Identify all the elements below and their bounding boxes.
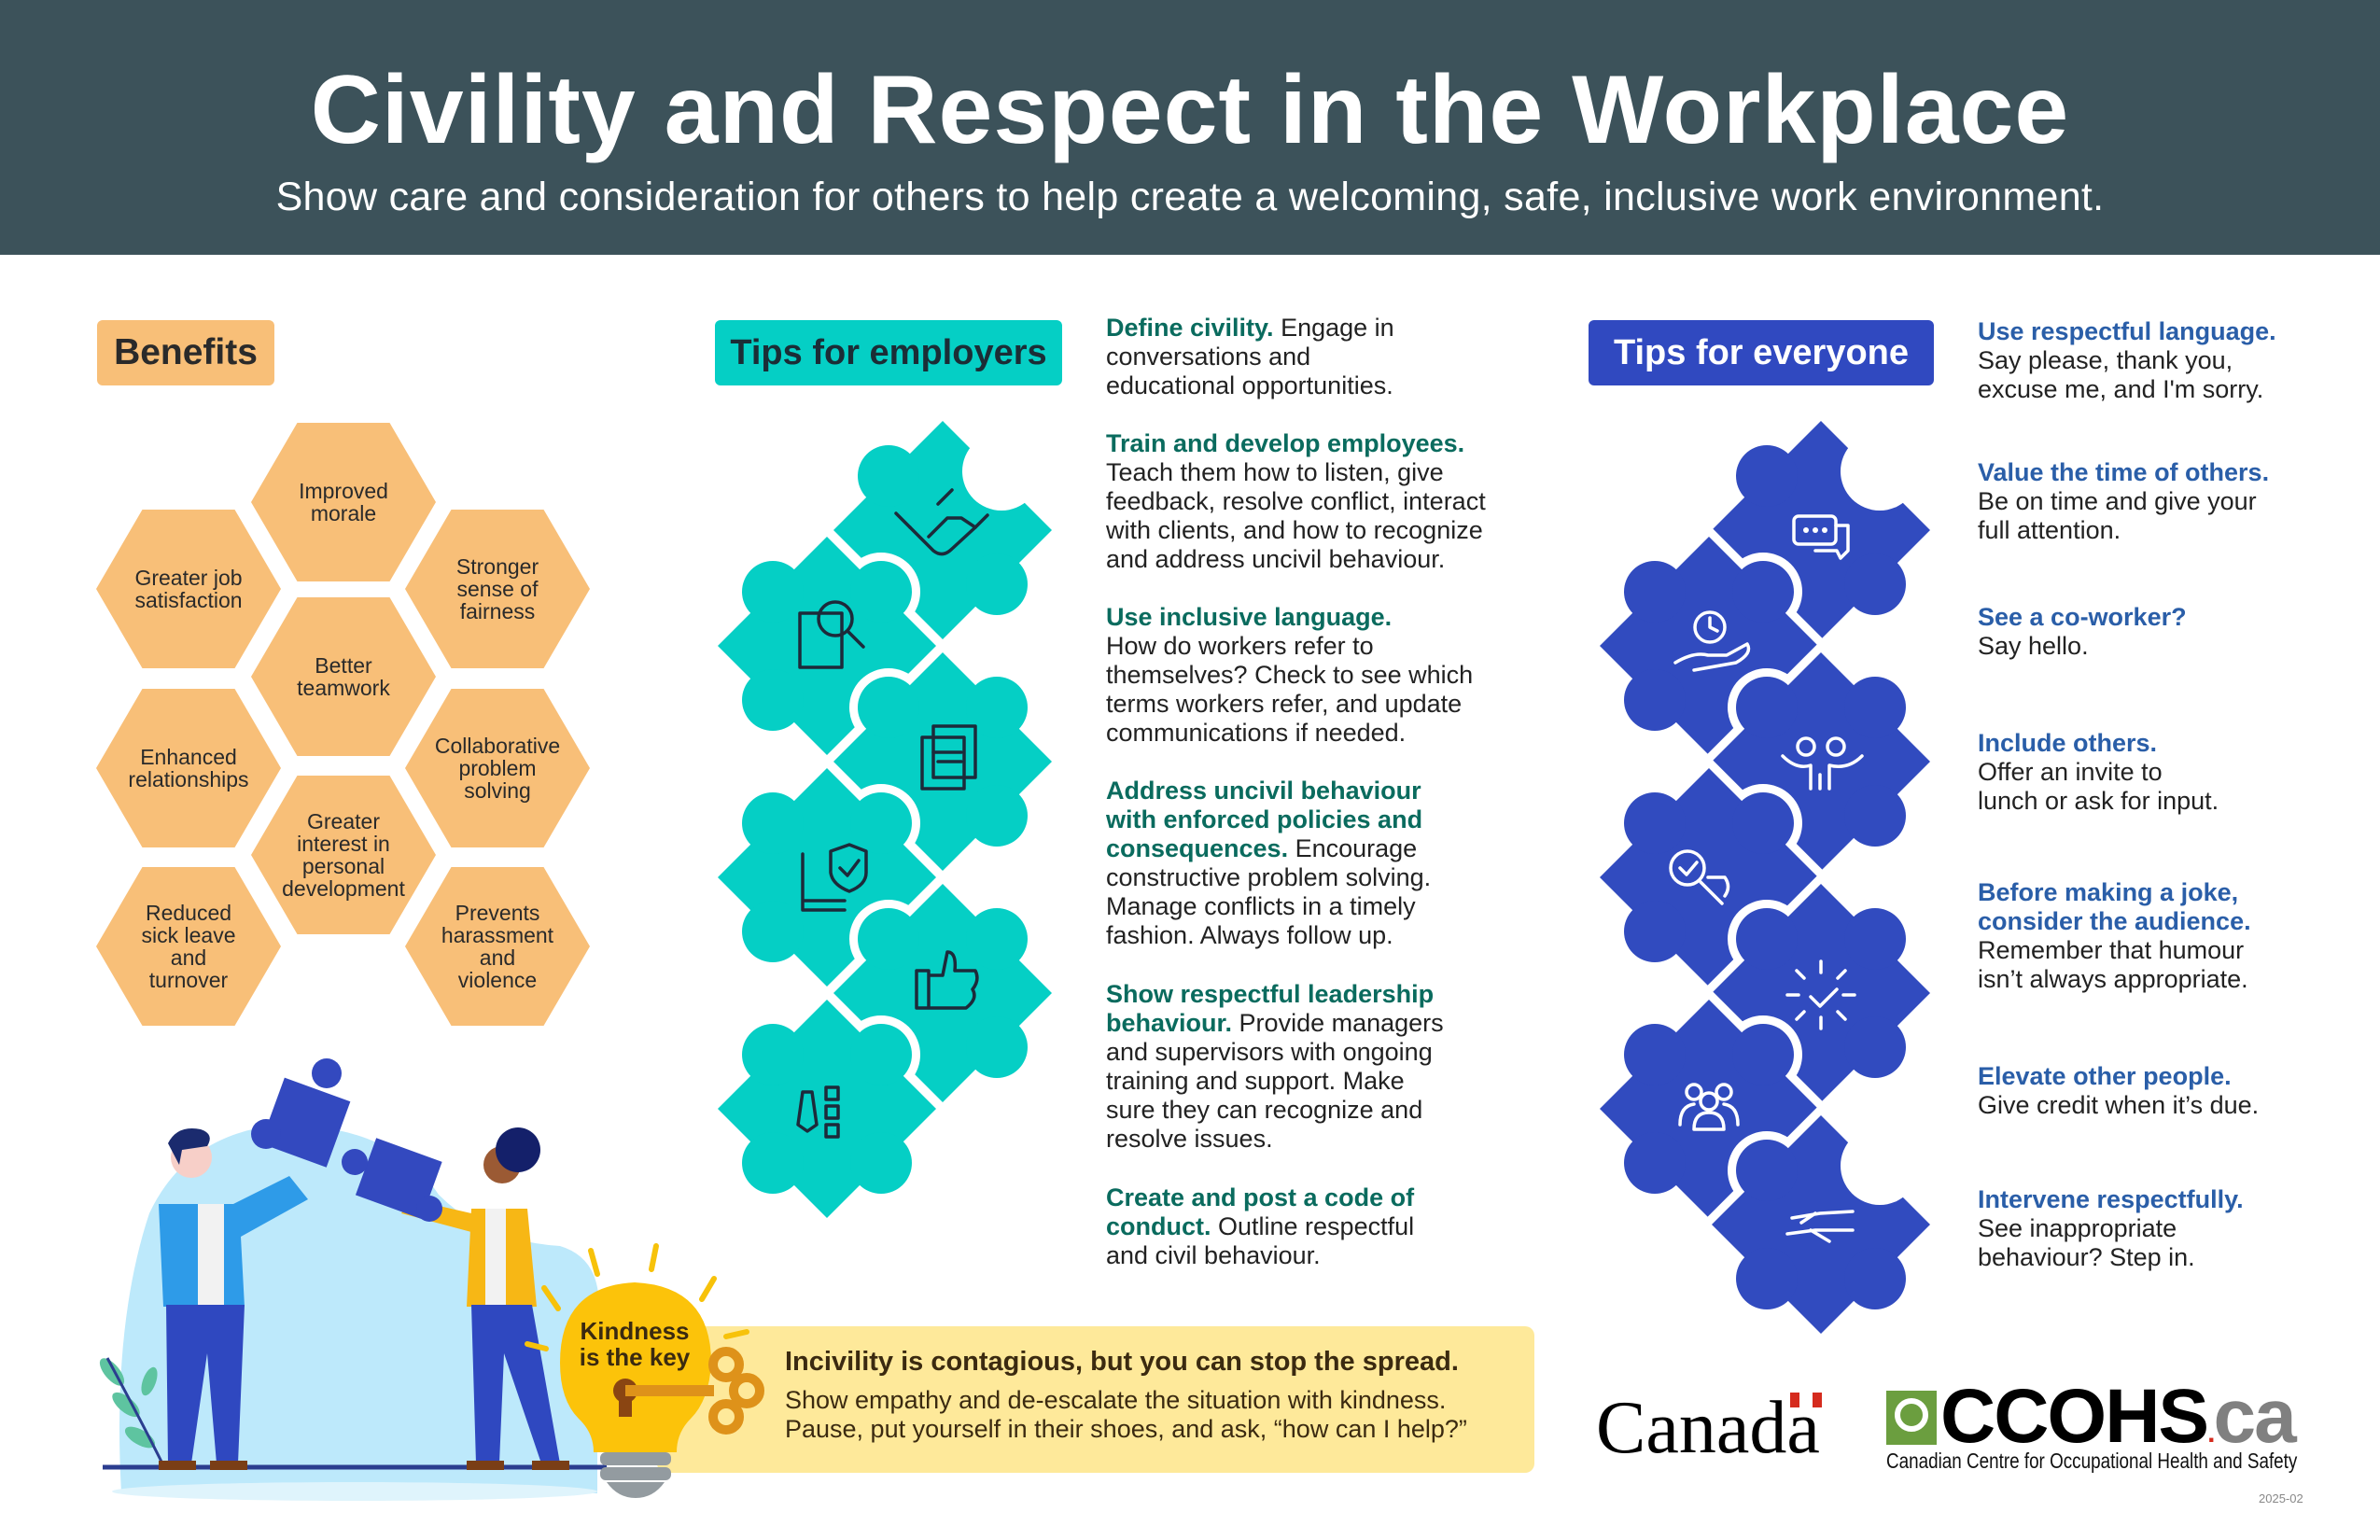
hex: prevents harassment: Prevents	[455, 901, 539, 925]
hex: stronger sense of fairness: Stronger	[456, 554, 539, 579]
text: employer tips	[1105, 314, 1486, 1269]
tip: include others: Include others.	[1978, 729, 2157, 757]
woman	[483, 1146, 521, 1183]
tip: joke: Before making a joke,	[1978, 878, 2238, 906]
tip: define civility: educational opportunities.	[1106, 371, 1393, 399]
tip: train and develop: feedback, resolve conflict, interact	[1106, 487, 1486, 515]
text: everyone tips	[1978, 317, 2276, 1271]
tip: intervene: See inappropriate	[1978, 1214, 2177, 1242]
callout: incivility is contagious: Pause, put yourself in their shoes, and ask, “how can I help?”	[785, 1415, 1467, 1443]
callout: incivility is contagious: Incivility is contagious, but you can stop the spread.	[785, 1347, 1459, 1377]
date code: 2025-02	[2259, 1491, 2303, 1505]
hex: enhanced relationships: Enhanced	[140, 745, 237, 769]
heading: Tips for everyone	[1589, 320, 1934, 385]
puzzle: everyone tips	[1600, 421, 1930, 1334]
hex: greater interest in personal development: development	[282, 876, 405, 901]
tip: value time: Be on time and give your	[1978, 487, 2257, 515]
hex: prevents harassment: and	[480, 945, 515, 970]
hex: enhanced relationships: relationships	[128, 767, 249, 791]
tip: code of conduct	[1106, 1183, 1415, 1269]
tip: value time	[1978, 458, 2269, 544]
panel: benefits hexagons	[96, 423, 590, 1026]
tip: intervene	[1978, 1185, 2244, 1271]
tip: code of conduct: and civil behaviour.	[1106, 1241, 1321, 1269]
tip: leadership: behaviour. Provide managers	[1106, 1009, 1444, 1037]
hex: reduced sick leave: turnover	[149, 968, 228, 992]
tip: leadership: sure they can recognize and	[1106, 1096, 1422, 1124]
tip: train and develop	[1106, 429, 1486, 573]
tip: address uncivil behaviour: Manage conflicts in a timely	[1106, 892, 1416, 920]
tip: address uncivil behaviour: constructive problem solving.	[1106, 863, 1431, 891]
hex: collaborative problem solving: Collaborative	[435, 734, 560, 758]
tip: respectful language: excuse me, and I'm sorry.	[1978, 375, 2263, 403]
tip: leadership: training and support. Make	[1106, 1067, 1405, 1095]
tip: define civility: conversations and	[1106, 343, 1310, 371]
tip: joke	[1978, 878, 2251, 993]
tip: inclusive language: How do workers refer to	[1106, 632, 1374, 660]
heading: Tips for employers	[715, 320, 1062, 385]
logo: CCOHS: CCOHS.ca	[1940, 1374, 2295, 1459]
tip: code of conduct: conduct. Outline respectful	[1106, 1212, 1414, 1240]
tip: train and develop: Train and develop employees.	[1106, 429, 1464, 457]
icon: lightbulb with key: Kindness	[580, 1317, 690, 1345]
tip: address uncivil behaviour	[1105, 777, 1431, 949]
tip: joke: isn’t always appropriate.	[1978, 965, 2248, 993]
tip: respectful language: Use respectful language.	[1978, 317, 2276, 345]
hex: stronger sense of fairness: sense of	[457, 577, 538, 601]
hex: greater job satisfaction	[96, 510, 281, 668]
heading: Tips for everyone: Tips for everyone	[1614, 333, 1909, 372]
puzzle pieces held	[251, 1058, 442, 1222]
hex: reduced sick leave: and	[171, 945, 206, 970]
logo: Canada wordmark: Canada	[1596, 1387, 1820, 1469]
tip: say hello: Say hello.	[1978, 632, 2089, 660]
tip: joke: Remember that humour	[1978, 936, 2244, 964]
hex: collaborative problem solving	[405, 689, 590, 847]
tip: leadership: resolve issues.	[1106, 1125, 1273, 1153]
tip: say hello	[1978, 603, 2187, 660]
tip: include others: Offer an invite to	[1978, 758, 2163, 786]
tip: code of conduct: Create and post a code of	[1106, 1183, 1414, 1211]
puzzle: employer tips	[718, 421, 1052, 1218]
title: Civility and Respect in the Workplace	[311, 56, 2069, 164]
tip: train and develop: and address uncivil behaviour.	[1106, 545, 1445, 573]
hex: reduced sick leave	[96, 867, 281, 1026]
header banner	[0, 0, 2380, 255]
tip: elevate others: Elevate other people.	[1978, 1062, 2232, 1090]
hex: greater job satisfaction: satisfaction	[134, 588, 243, 612]
hex: stronger sense of fairness	[405, 510, 590, 668]
icon: lightbulb with key: is the key	[580, 1343, 691, 1371]
icon: lightbulb with key	[525, 1243, 764, 1498]
tip: respectful language: Say please, thank you,	[1978, 346, 2233, 374]
tip: address uncivil behaviour: fashion. Always follow up.	[1106, 921, 1393, 949]
heading: Tips for employers: Tips for employers	[730, 333, 1047, 372]
tip: include others: lunch or ask for input.	[1978, 787, 2219, 815]
tip: include others	[1978, 729, 2219, 815]
hex: improved morale: morale	[311, 501, 376, 525]
hex: greater job satisfaction: Greater job	[134, 566, 243, 590]
hex: collaborative problem solving: problem	[458, 756, 537, 780]
tip: leadership	[1106, 980, 1444, 1153]
tip: inclusive language	[1106, 603, 1473, 747]
tip: leadership: Show respectful leadership	[1106, 980, 1434, 1008]
tip: address uncivil behaviour: consequences. Encourage	[1106, 834, 1417, 862]
hex: better teamwork: Better	[315, 653, 372, 678]
tip: intervene: Intervene respectfully.	[1978, 1185, 2244, 1213]
hex: reduced sick leave: Reduced	[146, 901, 231, 925]
man	[171, 1137, 212, 1178]
tip: elevate others: Give credit when it’s due.	[1978, 1091, 2259, 1119]
hex: greater interest in personal development: interest in	[297, 832, 390, 856]
hex: prevents harassment: harassment	[441, 923, 553, 947]
tip: define civility	[1106, 314, 1394, 399]
heading: Benefits	[97, 320, 274, 385]
tip: train and develop: Teach them how to listen, give	[1106, 458, 1444, 486]
hex: better teamwork	[251, 597, 436, 756]
tip: elevate others	[1978, 1062, 2259, 1119]
tip: value time: full attention.	[1978, 516, 2121, 544]
tip: address uncivil behaviour: with enforced policies and	[1106, 805, 1422, 833]
tip: leadership: and supervisors with ongoing	[1106, 1038, 1433, 1066]
tip: say hello: See a co-worker?	[1978, 603, 2187, 631]
hex: greater interest in personal development: Greater	[307, 809, 380, 833]
tip: inclusive language: Use inclusive language.	[1106, 603, 1392, 631]
hex: better teamwork: teamwork	[297, 676, 390, 700]
hex: prevents harassment	[405, 867, 590, 1026]
tip: value time: Value the time of others.	[1978, 458, 2269, 486]
hex: greater interest in personal development	[251, 776, 436, 934]
hex: prevents harassment: violence	[458, 968, 537, 992]
hex: collaborative problem solving: solving	[464, 778, 531, 803]
tip: respectful language	[1978, 317, 2276, 403]
tip: train and develop: with clients, and how to recognize	[1106, 516, 1483, 544]
tip: inclusive language: terms workers refer, and update	[1106, 690, 1462, 718]
heading: Benefits: Benefits	[114, 332, 258, 372]
hex: stronger sense of fairness: fairness	[460, 599, 535, 623]
tip: address uncivil behaviour: Address uncivil behaviour	[1106, 777, 1421, 805]
illustration: people joining puzzle pieces	[99, 1058, 607, 1501]
hex: improved morale	[251, 423, 436, 581]
hex: reduced sick leave: sick leave	[142, 923, 235, 947]
tip: intervene: behaviour? Step in.	[1978, 1243, 2195, 1271]
hex: improved morale: Improved	[299, 479, 388, 503]
hex: greater interest in personal development: personal	[302, 854, 385, 878]
callout: incivility is contagious: Show empathy and de-escalate the situation with kindness.	[785, 1386, 1446, 1414]
tip: define civility: Define civility. Engage in	[1106, 314, 1394, 342]
subtitle: Show care and consideration for others to help create a welcoming, safe, inclusive work environment.	[276, 175, 2104, 219]
callout: incivility is contagious	[657, 1326, 1534, 1473]
hex: enhanced relationships	[96, 689, 281, 847]
tip: inclusive language: themselves? Check to see which	[1106, 661, 1473, 689]
tip: joke: consider the audience.	[1978, 907, 2251, 935]
logo: CCOHS: Canadian Centre for Occupational Health and Safety	[1886, 1449, 2297, 1473]
tip: inclusive language: communications if needed.	[1106, 719, 1406, 747]
